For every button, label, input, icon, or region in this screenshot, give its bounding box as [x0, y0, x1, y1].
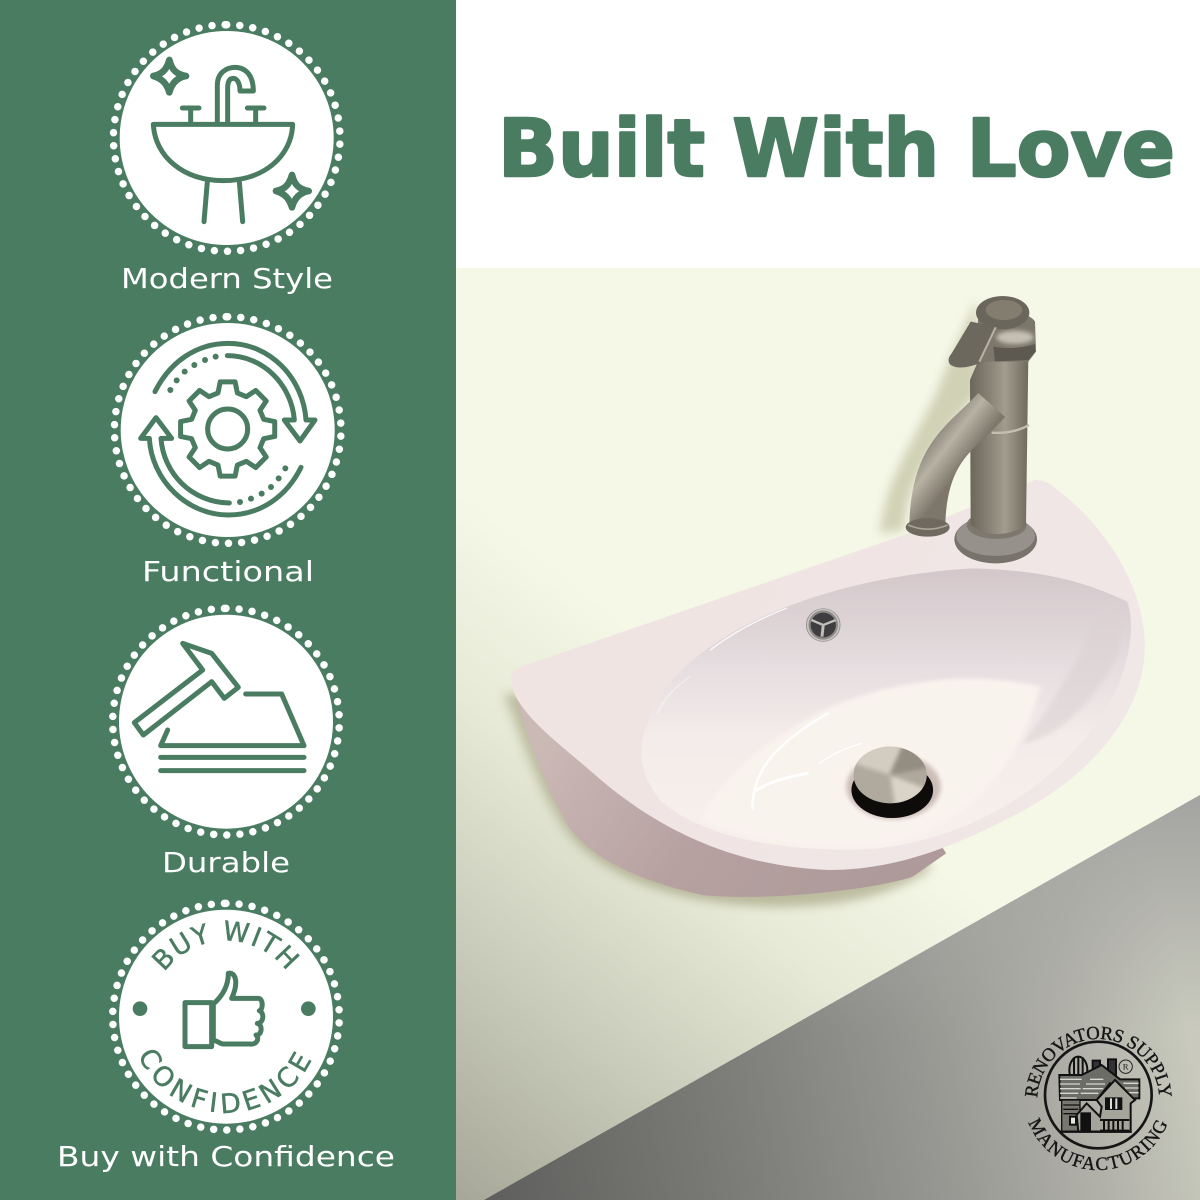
label: Functional — [142, 555, 314, 588]
glaze highlights — [658, 608, 862, 808]
white disc — [120, 31, 334, 245]
badge: durable — [113, 608, 339, 879]
sink shadow — [504, 693, 929, 907]
bowl basin floor — [702, 679, 1041, 847]
badge: functional — [114, 317, 341, 588]
icon: gear with cycle arrows — [141, 343, 315, 515]
overflow drain — [806, 608, 840, 642]
dotted ring — [113, 608, 339, 835]
icon: sink with sparkles — [153, 60, 309, 222]
logo registered mark: R — [1123, 1062, 1129, 1072]
icon: hammer on layered surface — [134, 643, 304, 771]
bowl side shading — [1022, 600, 1127, 743]
faucet cap — [976, 296, 1036, 362]
spout end ring — [906, 518, 950, 537]
dotted ring — [113, 25, 340, 251]
sink rim — [511, 480, 1145, 870]
label: Buy with Confidence — [57, 1140, 395, 1173]
logo: renovators supply manufacturing — [1024, 1026, 1172, 1170]
seal lettering and thumb — [132, 920, 316, 1114]
sink bowl — [641, 568, 1131, 850]
wall background — [456, 268, 1200, 1200]
white disc — [121, 323, 335, 537]
label: Modern Style — [121, 262, 333, 295]
faucet shadow — [880, 300, 980, 533]
logo registered mark — [1119, 1060, 1132, 1073]
title: Built With Love — [498, 103, 1175, 195]
panel: green sidebar — [0, 0, 456, 1200]
panel: product photo — [456, 268, 1200, 1200]
label: Durable — [162, 846, 290, 879]
counter surface — [484, 795, 1200, 1200]
pop-up drain — [846, 743, 941, 819]
logo text: bottom: MANUFACTURING — [1028, 1117, 1167, 1170]
dotted ring — [114, 317, 341, 543]
faucet spout — [927, 405, 992, 523]
white disc — [119, 910, 333, 1124]
logo house illustration — [1059, 1057, 1139, 1132]
seal text: confidence: CONFIDENCE — [141, 1050, 312, 1114]
faucet base — [954, 511, 1037, 563]
faucet — [906, 296, 1037, 563]
panel: white title band — [456, 0, 1200, 268]
badge: buy with confidence — [57, 900, 395, 1173]
logo ring — [1045, 1042, 1152, 1148]
dotted ring — [113, 903, 339, 1130]
sink pedestal — [513, 687, 946, 897]
wall-mounted sink — [511, 480, 1145, 897]
icon: thumbs up — [185, 973, 263, 1047]
badge: modern style — [113, 25, 340, 295]
faucet column — [970, 357, 1028, 534]
logo text: top: RENOVATORS SUPPLY — [1024, 1026, 1172, 1098]
seal dots — [133, 1001, 316, 1016]
seal text: buy with: BUY WITH — [151, 920, 300, 970]
faucet lever — [949, 322, 996, 367]
white disc — [119, 615, 333, 829]
